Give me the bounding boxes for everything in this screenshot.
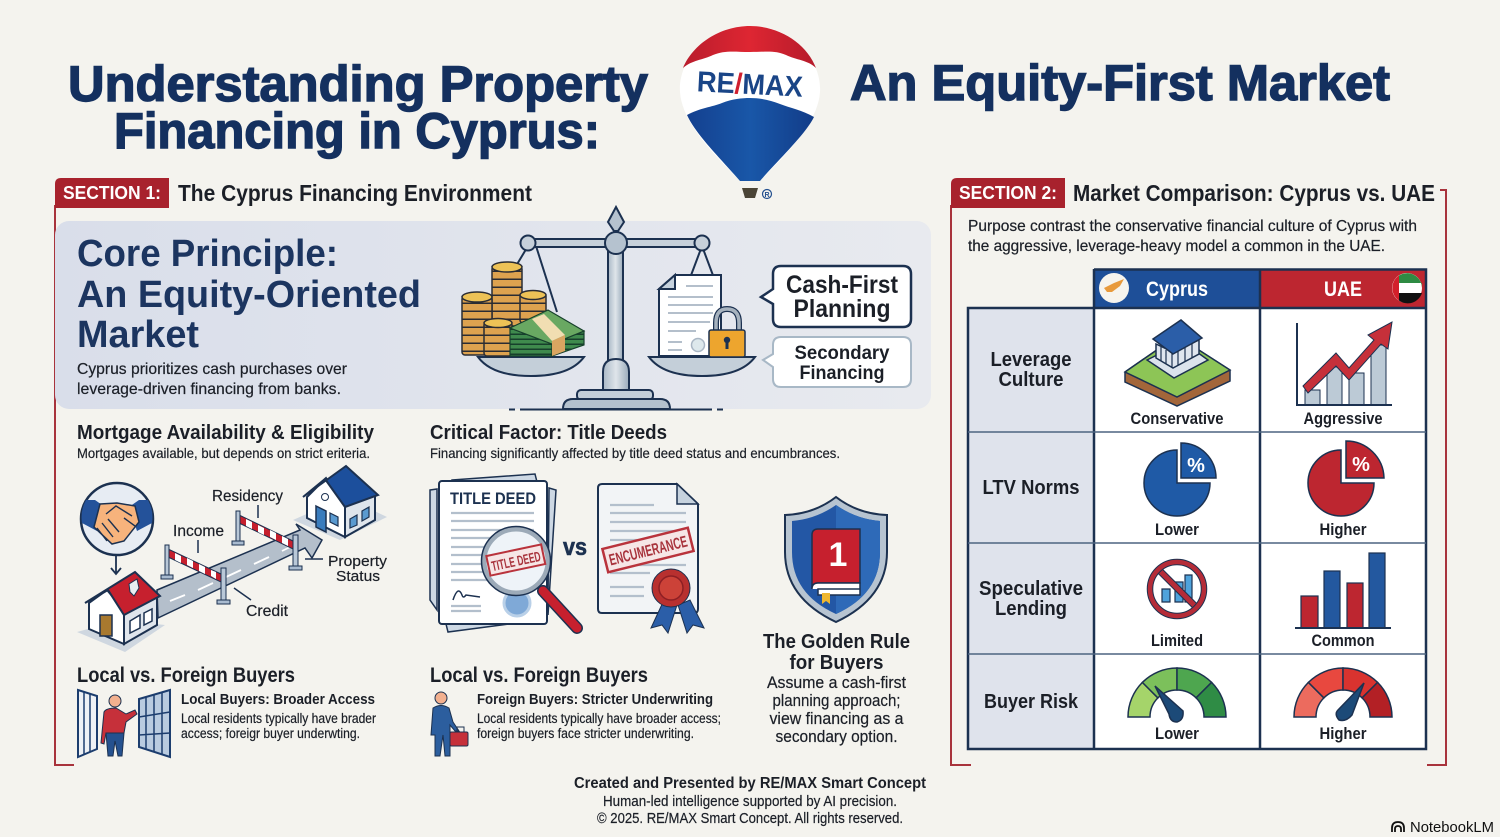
row label: Lending [995,598,1067,620]
core principle heading [77,233,421,356]
section 1 tag: SECTION 1: [63,183,161,203]
icon: magnifying glass: TITLE DEED [490,548,542,574]
footer credits [574,775,927,827]
icon: red pie chart [1308,441,1384,516]
labels: eligibility criteria: Property [328,553,388,570]
row: leverage culture [990,320,1392,428]
text block: golden rule: secondary option. [776,728,898,746]
text block: mortgage availability: Mortgage Availability & Eligibility [77,422,375,444]
logo: RE/MAX balloon [680,26,820,199]
panel: local buyers [77,663,376,757]
core principle heading: Market [77,314,199,356]
labels: eligibility criteria: Residency [212,488,283,505]
icon: red-roof house [77,572,165,652]
icon: document and padlock [659,275,745,357]
footer credits: © 2025. RE/MAX Smart Concept. All rights reserved. [597,811,903,827]
row: LTV norms [982,441,1384,539]
table header: Cyprus: Cyprus [1146,278,1208,301]
icon: red pie chart: % [1352,454,1370,476]
row: speculative lending [979,553,1391,650]
text block: mortgage availability: Mortgages available, but depends on strict eriteria. [77,445,370,461]
section 2 intro text: the aggressive, leverage-heavy model a common in the UAE. [968,238,1385,255]
icon: bar chart [1295,553,1391,628]
section 1 frame [55,205,74,765]
icon: encumbrance document [598,484,704,633]
section 2 intro text [968,218,1417,255]
watermark: NotebookLM: NotebookLM [1410,820,1494,836]
icon: title deed stack [430,474,556,632]
text block: title deeds: Critical Factor: Title Deeds [430,422,667,444]
illustration: eligibility road [77,466,388,652]
text block: golden rule: view financing as a [770,710,904,728]
text block: foreign buyers: Foreign Buyers: Stricter Underwriting [477,691,713,708]
section 1 heading: The Cyprus Financing Environment [178,180,532,206]
row label: LTV Norms [982,477,1080,499]
text: higher: Higher [1320,521,1367,539]
row label: Leverage [990,349,1072,371]
icon: UAE flag [1392,273,1422,303]
icon: blue pie chart [1144,443,1216,516]
comparison table [968,269,1426,749]
table header: Cyprus [1094,269,1260,308]
text block: title deeds: Financing significantly affected by title deed status and encumbrances. [430,445,840,461]
panel: section 2 [951,178,1446,765]
text block: golden rule [763,630,910,746]
row label: Buyer Risk [984,691,1079,713]
section 2 heading: Market Comparison: Cyprus vs. UAE [1073,180,1435,206]
footer credits: Human-led intelligence supported by AI precision. [603,794,897,810]
title: left part: Understanding Property [68,56,648,112]
icon: encumbrance document: ENCUMERANCE [607,533,689,569]
text block: local buyers [181,691,376,741]
core principle heading: An Equity-Oriented [77,274,421,316]
core principle text: Cyprus prioritizes cash purchases over [77,361,348,378]
table header: UAE: UAE [1324,278,1362,301]
text: lower: Lower [1155,725,1200,743]
section 1 tag [55,178,169,208]
icon: title deed stack: TITLE DEED [450,489,536,508]
footer credits: Created and Presented by RE/MAX Smart Concept [574,775,927,792]
icon: red gauge [1294,668,1392,720]
illustration: title deed vs encumbrance [430,474,704,633]
callout: secondary financing: Secondary [794,343,890,364]
row: buyer risk [984,668,1392,743]
title: right part: An Equity-First Market [850,55,1390,111]
text block: local buyers: access; foreigr buyer underwting. [181,726,360,741]
text: limited: Limited [1151,632,1203,650]
callout: cash-first planning: Planning [794,295,890,323]
arrow: handshake to house [111,556,121,574]
core principle text [77,361,348,398]
vs label: vs [563,534,587,561]
barrier: residency [232,511,302,570]
icon: golden rule shield: 1 [829,536,847,574]
road [157,524,322,618]
left pan [478,357,584,376]
text block: golden rule: planning approach; [772,692,900,710]
icon: blue pie chart: % [1187,455,1205,477]
icon: person with briefcase [431,692,468,756]
title: left part [68,56,648,159]
text: common: Common [1312,632,1374,650]
labels: eligibility criteria: Status [336,568,380,585]
text block: local buyers: Local Buyers: Broader Access [181,691,375,708]
logo: RE/MAX balloon: RE/MAX [696,66,804,104]
section 2 tag: SECTION 2: [959,183,1057,203]
icon: coins and cash [462,262,584,356]
text block: foreign buyers: foreign buyers face stricter underwriting. [477,726,694,741]
text: conservative: Conservative [1130,410,1224,428]
icon: rising chart [1297,322,1392,405]
labels: eligibility criteria [173,488,388,620]
text block: golden rule: Assume a cash-first [767,674,906,692]
text block: title deeds [430,422,840,461]
section 2 tag [951,178,1065,208]
core principle heading: Core Principle: [77,233,338,275]
text block: local buyers: Local residents typically have brader [181,711,376,726]
callout: cash-first planning [761,266,911,327]
icon: blue-roof house [293,466,387,540]
section 2 frame [951,190,1446,765]
row label: Culture [998,369,1064,391]
table grid [968,269,1426,749]
labels: eligibility criteria: Credit [246,603,289,620]
row label [979,578,1083,620]
logo: RE/MAX balloon: R [764,192,770,199]
heading: local vs foreign: Local vs. Foreign Buyers [430,663,648,687]
text block: golden rule: for Buyers [790,651,884,674]
icon: handshake [81,483,153,555]
panel: section 1 [55,178,931,765]
barrier: income [161,545,230,604]
icon: golden rule shield [785,497,887,622]
icon: magnifying glass [482,526,577,628]
text block: mortgage availability [77,422,375,461]
callout: secondary financing: Financing [800,363,884,384]
right pan [649,357,755,376]
core principle text: leverage-driven financing from banks. [77,381,341,398]
panel: foreign buyers [430,663,721,756]
icon: bank on land [1125,320,1230,406]
labels: eligibility criteria: Income [173,523,224,540]
callout: secondary financing [763,337,911,387]
icon: green gauge [1128,668,1226,722]
text: lower: Lower [1155,521,1200,539]
table header: UAE [1260,269,1426,308]
row label: Speculative [979,578,1083,600]
heading: local vs foreign: Local vs. Foreign Buyers [77,663,295,687]
icon: person at open gate [78,690,170,757]
text block: foreign buyers [477,691,721,741]
text: aggressive: Aggressive [1304,410,1382,428]
icon: balance scale [478,207,755,410]
text: higher: Higher [1320,725,1367,743]
title: left part: Financing in Cyprus: [114,103,600,159]
text block: foreign buyers: Local residents typically have broader access; [477,711,721,726]
panel: core principle [55,207,931,410]
text block: golden rule: The Golden Rule [763,630,910,653]
section 2 intro text: Purpose contrast the conservative financial culture of Cyprus with [968,218,1417,235]
icon: prohibited chart [1150,562,1204,616]
row label [990,349,1072,391]
callout: cash-first planning: Cash-First [786,271,899,299]
